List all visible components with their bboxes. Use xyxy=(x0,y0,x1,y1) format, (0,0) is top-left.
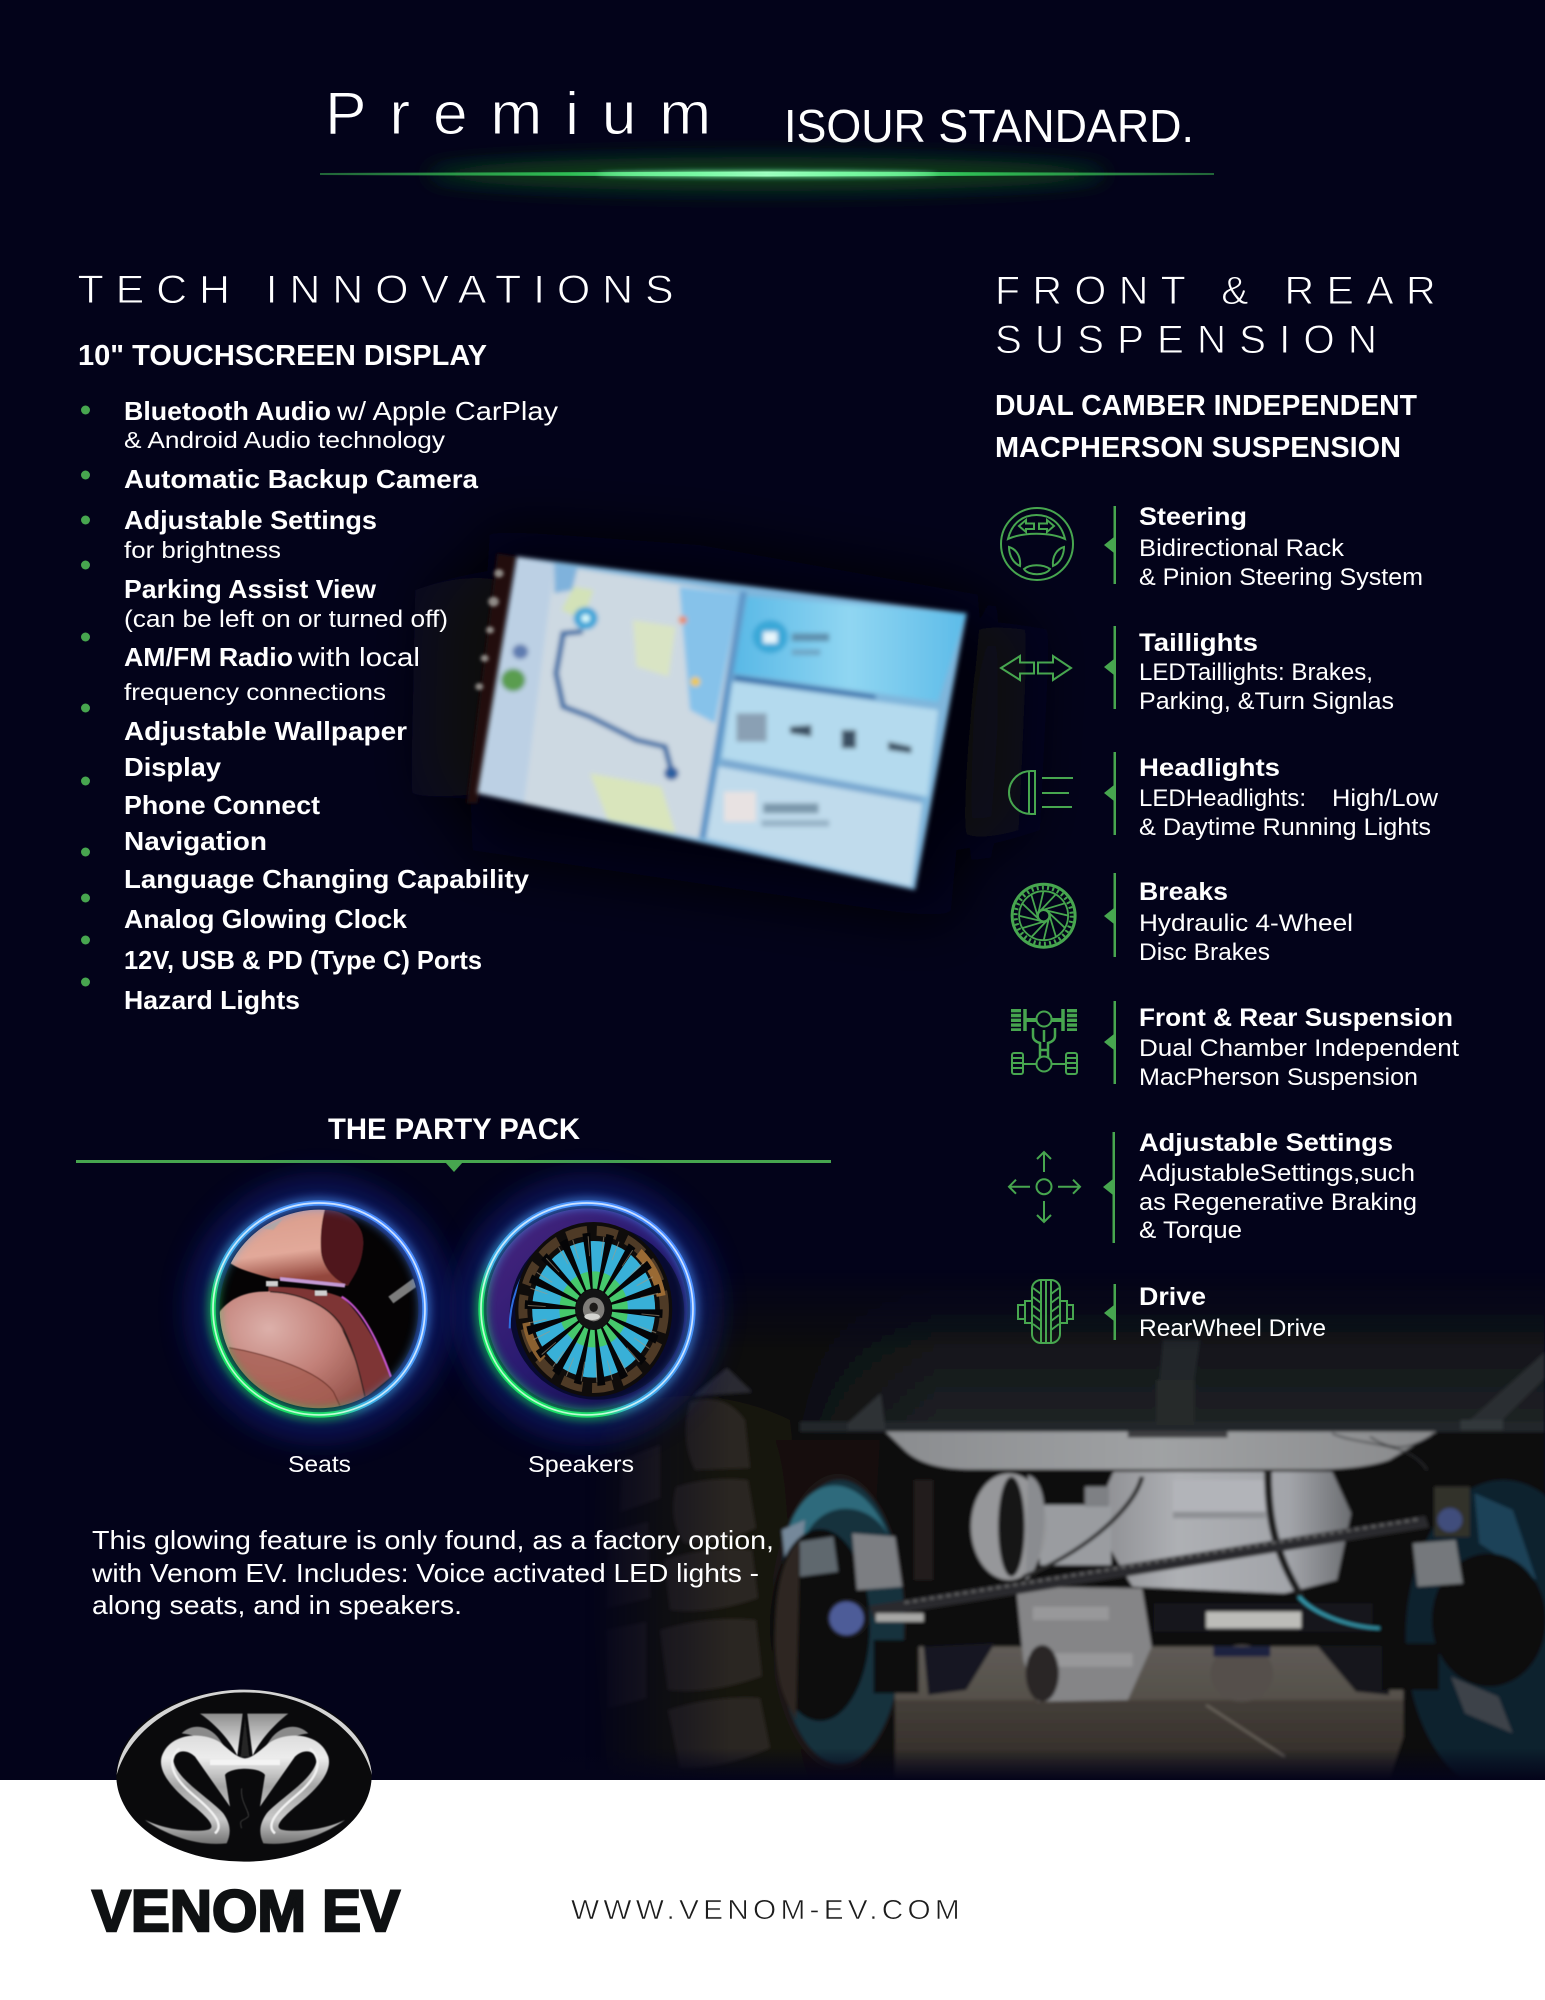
label: steering: Steering xyxy=(1139,503,1247,531)
label: headlights xyxy=(1139,754,1439,841)
feature: wallpaper xyxy=(124,716,407,782)
icon: brake disc xyxy=(1012,884,1075,947)
label: steering: Bidirectional Rack xyxy=(1139,535,1345,562)
feature: parking assist: Parking Assist View xyxy=(124,574,377,604)
item: headlights xyxy=(1009,752,1439,841)
heading: front and rear suspension xyxy=(995,269,1448,362)
panel: tech innovations xyxy=(78,268,686,1015)
tie rod xyxy=(871,1522,1427,1612)
label: steering: & Pinion Steering System xyxy=(1139,564,1423,591)
marker xyxy=(1104,752,1116,835)
label: drive: RearWheel Drive xyxy=(1139,1315,1326,1342)
footer white band xyxy=(0,1780,1545,2000)
label: taillights: LEDTaillights: Brakes, xyxy=(1139,659,1373,686)
marker xyxy=(1104,1001,1116,1084)
dashboard photo with touchscreen xyxy=(430,530,1030,920)
bullet markers xyxy=(81,406,90,986)
marker xyxy=(1104,626,1116,709)
headline word: Premium: Premium xyxy=(325,80,734,147)
label: drive xyxy=(1139,1283,1326,1342)
label: adjustable settings: AdjustableSettings,such xyxy=(1139,1160,1415,1187)
feature: backup camera: Automatic Backup Camera xyxy=(124,464,479,494)
label: headlights: Headlights xyxy=(1139,754,1280,782)
seats image xyxy=(202,1192,436,1426)
website url: WWW.VENOM-EV.COM xyxy=(571,1894,964,1925)
subheading: dual camber xyxy=(995,390,1417,464)
icon: steering wheel xyxy=(1001,508,1073,580)
label: headlights: High/Low xyxy=(1332,785,1439,812)
feature: adjustable settings: Adjustable Settings xyxy=(124,505,377,535)
icon: four-way adjust xyxy=(1009,1152,1080,1222)
caption: speakers: Speakers xyxy=(528,1451,634,1477)
panel: party pack xyxy=(76,1113,831,1620)
feature: radio: frequency connections xyxy=(124,679,386,705)
central drivetrain xyxy=(800,1380,1545,1793)
icon: headlight xyxy=(1009,771,1073,814)
feature: bluetooth audio: & Android Audio technology xyxy=(124,427,446,453)
right wheel xyxy=(1394,1433,1439,1773)
icon: taillight arrows xyxy=(1001,656,1071,680)
label: front and rear suspension: Front & Rear Suspension xyxy=(1139,1004,1453,1032)
label: breaks: Hydraulic 4-Wheel xyxy=(1139,910,1353,937)
feature: adjustable settings: for brightness xyxy=(124,537,281,563)
item: front and rear suspension xyxy=(1012,1001,1459,1091)
party pack description: with Venom EV. Includes: Voice activated LED lights - xyxy=(91,1558,759,1588)
divider with pointer xyxy=(76,1160,831,1172)
label: adjustable settings: as Regenerative Braking xyxy=(1139,1189,1417,1216)
marker xyxy=(1104,506,1116,584)
feature: bluetooth audio: Bluetooth Audio xyxy=(124,396,331,426)
brand name: VENOM EV xyxy=(92,1879,400,1944)
marker xyxy=(1104,873,1116,957)
headline words: is our standard: ISOUR STANDARD. xyxy=(784,100,1194,152)
speakers image xyxy=(470,1192,704,1426)
feature: clock: Analog Glowing Clock xyxy=(124,904,408,934)
feature: ports: 12V, USB & PD (Type C) Ports xyxy=(124,945,482,975)
label: breaks xyxy=(1139,878,1353,966)
logo: venom cobra emblem xyxy=(116,1690,372,1862)
feature: bluetooth audio: w/ Apple CarPlay xyxy=(336,396,558,426)
caption: seats: Seats xyxy=(288,1451,351,1477)
label: front and rear suspension: MacPherson Suspension xyxy=(1139,1064,1418,1091)
heading: front and rear suspension: SUSPENSION xyxy=(995,318,1390,362)
label: breaks: Breaks xyxy=(1139,878,1228,906)
subheading: touchscreen display: 10" TOUCHSCREEN DISPLAY xyxy=(78,340,487,372)
feature: phone connect: Phone Connect xyxy=(124,790,320,820)
subheading: dual camber: DUAL CAMBER INDEPENDENT xyxy=(995,390,1417,422)
icon: suspension xyxy=(1012,1009,1077,1074)
heading: the party pack: THE PARTY PACK xyxy=(328,1113,580,1146)
panel: front and rear suspension xyxy=(995,269,1459,1343)
feature: radio: AM/FM Radio xyxy=(124,642,293,672)
heading: tech innovations: TECH INNOVATIONS xyxy=(78,268,686,312)
tire tread xyxy=(625,1396,880,1767)
feature: parking assist: (can be left on or turned off) xyxy=(124,606,448,633)
label: headlights: LEDHeadlights: xyxy=(1139,785,1306,812)
label: adjustable settings: Adjustable Settings xyxy=(1139,1129,1393,1157)
party pack description xyxy=(91,1525,774,1620)
feature: radio: with local xyxy=(297,642,420,672)
marker xyxy=(1103,1132,1115,1243)
party pack description: along seats, and in speakers. xyxy=(92,1590,462,1620)
left wheel rim xyxy=(770,1474,906,1770)
headline xyxy=(325,80,1194,152)
label: headlights: & Daytime Running Lights xyxy=(1139,814,1431,841)
label: front and rear suspension: Dual Chamber Independent xyxy=(1139,1035,1459,1062)
label: steering xyxy=(1139,503,1423,591)
label: adjustable settings: & Torque xyxy=(1139,1217,1242,1244)
party pack description: This glowing feature is only found, as a factory option, xyxy=(92,1525,774,1555)
heading: front and rear suspension: FRONT & REAR xyxy=(995,269,1448,313)
icon: tire and axle xyxy=(1018,1280,1073,1343)
subheading: dual camber: MACPHERSON SUSPENSION xyxy=(995,432,1401,464)
label: taillights xyxy=(1139,629,1394,715)
glowing green divider xyxy=(320,157,1214,191)
label: drive: Drive xyxy=(1139,1283,1206,1311)
label: adjustable settings xyxy=(1139,1129,1417,1244)
item: steering xyxy=(1001,503,1423,591)
underbody chassis photo xyxy=(616,1314,1545,1774)
feature: wallpaper: Adjustable Wallpaper xyxy=(124,716,407,746)
left hub details xyxy=(800,1537,838,1577)
item: adjustable settings xyxy=(1009,1129,1417,1244)
feature: wallpaper: Display xyxy=(124,752,222,782)
item: breaks xyxy=(1012,873,1353,966)
item: drive xyxy=(1018,1280,1326,1343)
feature: hazard lights: Hazard Lights xyxy=(124,985,300,1015)
label: taillights: Taillights xyxy=(1139,629,1258,657)
label: taillights: Parking, &Turn Signlas xyxy=(1139,688,1394,715)
label: front and rear suspension xyxy=(1139,1004,1459,1091)
feature: radio xyxy=(124,642,420,705)
marker xyxy=(1104,1284,1116,1340)
feature: navigation: Navigation xyxy=(124,826,267,856)
feature: bluetooth audio xyxy=(124,396,558,453)
label: breaks: Disc Brakes xyxy=(1139,939,1270,966)
feature: language: Language Changing Capability xyxy=(124,864,530,894)
feature: parking assist xyxy=(124,574,448,633)
item: taillights xyxy=(1001,626,1394,715)
feature: adjustable settings xyxy=(124,505,377,563)
